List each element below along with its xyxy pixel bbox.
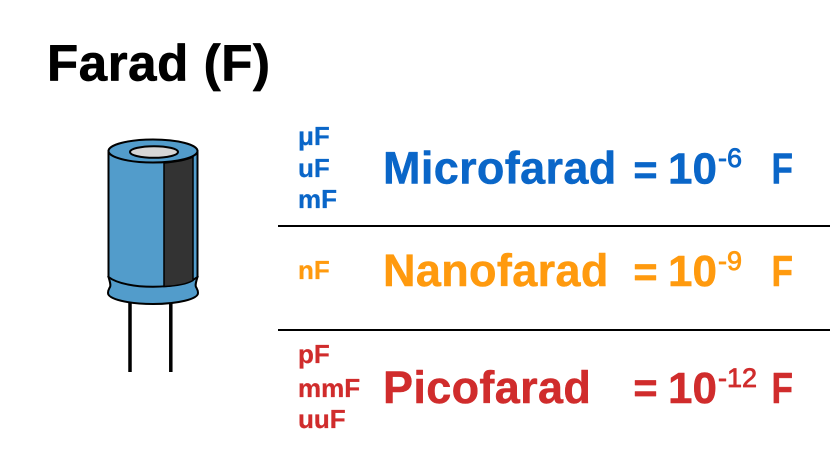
picofarad value: = [634, 365, 657, 411]
nanofarad name: Nanofarad [383, 245, 609, 296]
nanofarad value: = [634, 249, 657, 295]
microfarad value: F [772, 145, 793, 193]
nanofarad value [634, 246, 793, 296]
microfarad value: = [634, 147, 657, 193]
microfarad abbreviations: mF [298, 184, 337, 214]
divider lines [278, 226, 830, 330]
capacitor stripe [164, 157, 193, 286]
picofarad value: F [772, 364, 793, 413]
capacitor leads [130, 300, 171, 372]
picofarad value: -12 [718, 363, 757, 393]
microfarad value: -6 [718, 143, 742, 173]
row: picofarad [298, 339, 793, 434]
capacitor centre [130, 146, 178, 158]
microfarad abbreviations [298, 121, 337, 214]
capacitor base [108, 277, 198, 304]
picofarad value [634, 363, 793, 413]
picofarad value: 10 [668, 364, 717, 413]
nanofarad value: 10 [668, 247, 717, 296]
picofarad name: Picofarad [383, 362, 591, 413]
microfarad name: Microfarad [383, 142, 617, 194]
nanofarad value: F [772, 247, 793, 296]
row: nanofarad [298, 245, 793, 296]
microfarad value [634, 143, 793, 194]
title: Farad (F) [47, 34, 271, 92]
microfarad abbreviations: μF [298, 121, 330, 151]
picofarad abbreviations: uuF [298, 404, 346, 434]
row: microfarad [298, 121, 793, 214]
icon: capacitor [108, 140, 198, 372]
capacitor top [108, 140, 198, 162]
nanofarad value: -9 [718, 246, 742, 276]
picofarad abbreviations: mmF [298, 373, 360, 403]
picofarad abbreviations [298, 339, 360, 434]
nanofarad abbreviation: nF [298, 255, 330, 285]
capacitor body [108, 151, 198, 287]
picofarad abbreviations: pF [298, 339, 330, 369]
microfarad value: 10 [668, 144, 717, 194]
microfarad abbreviations: uF [298, 153, 330, 183]
